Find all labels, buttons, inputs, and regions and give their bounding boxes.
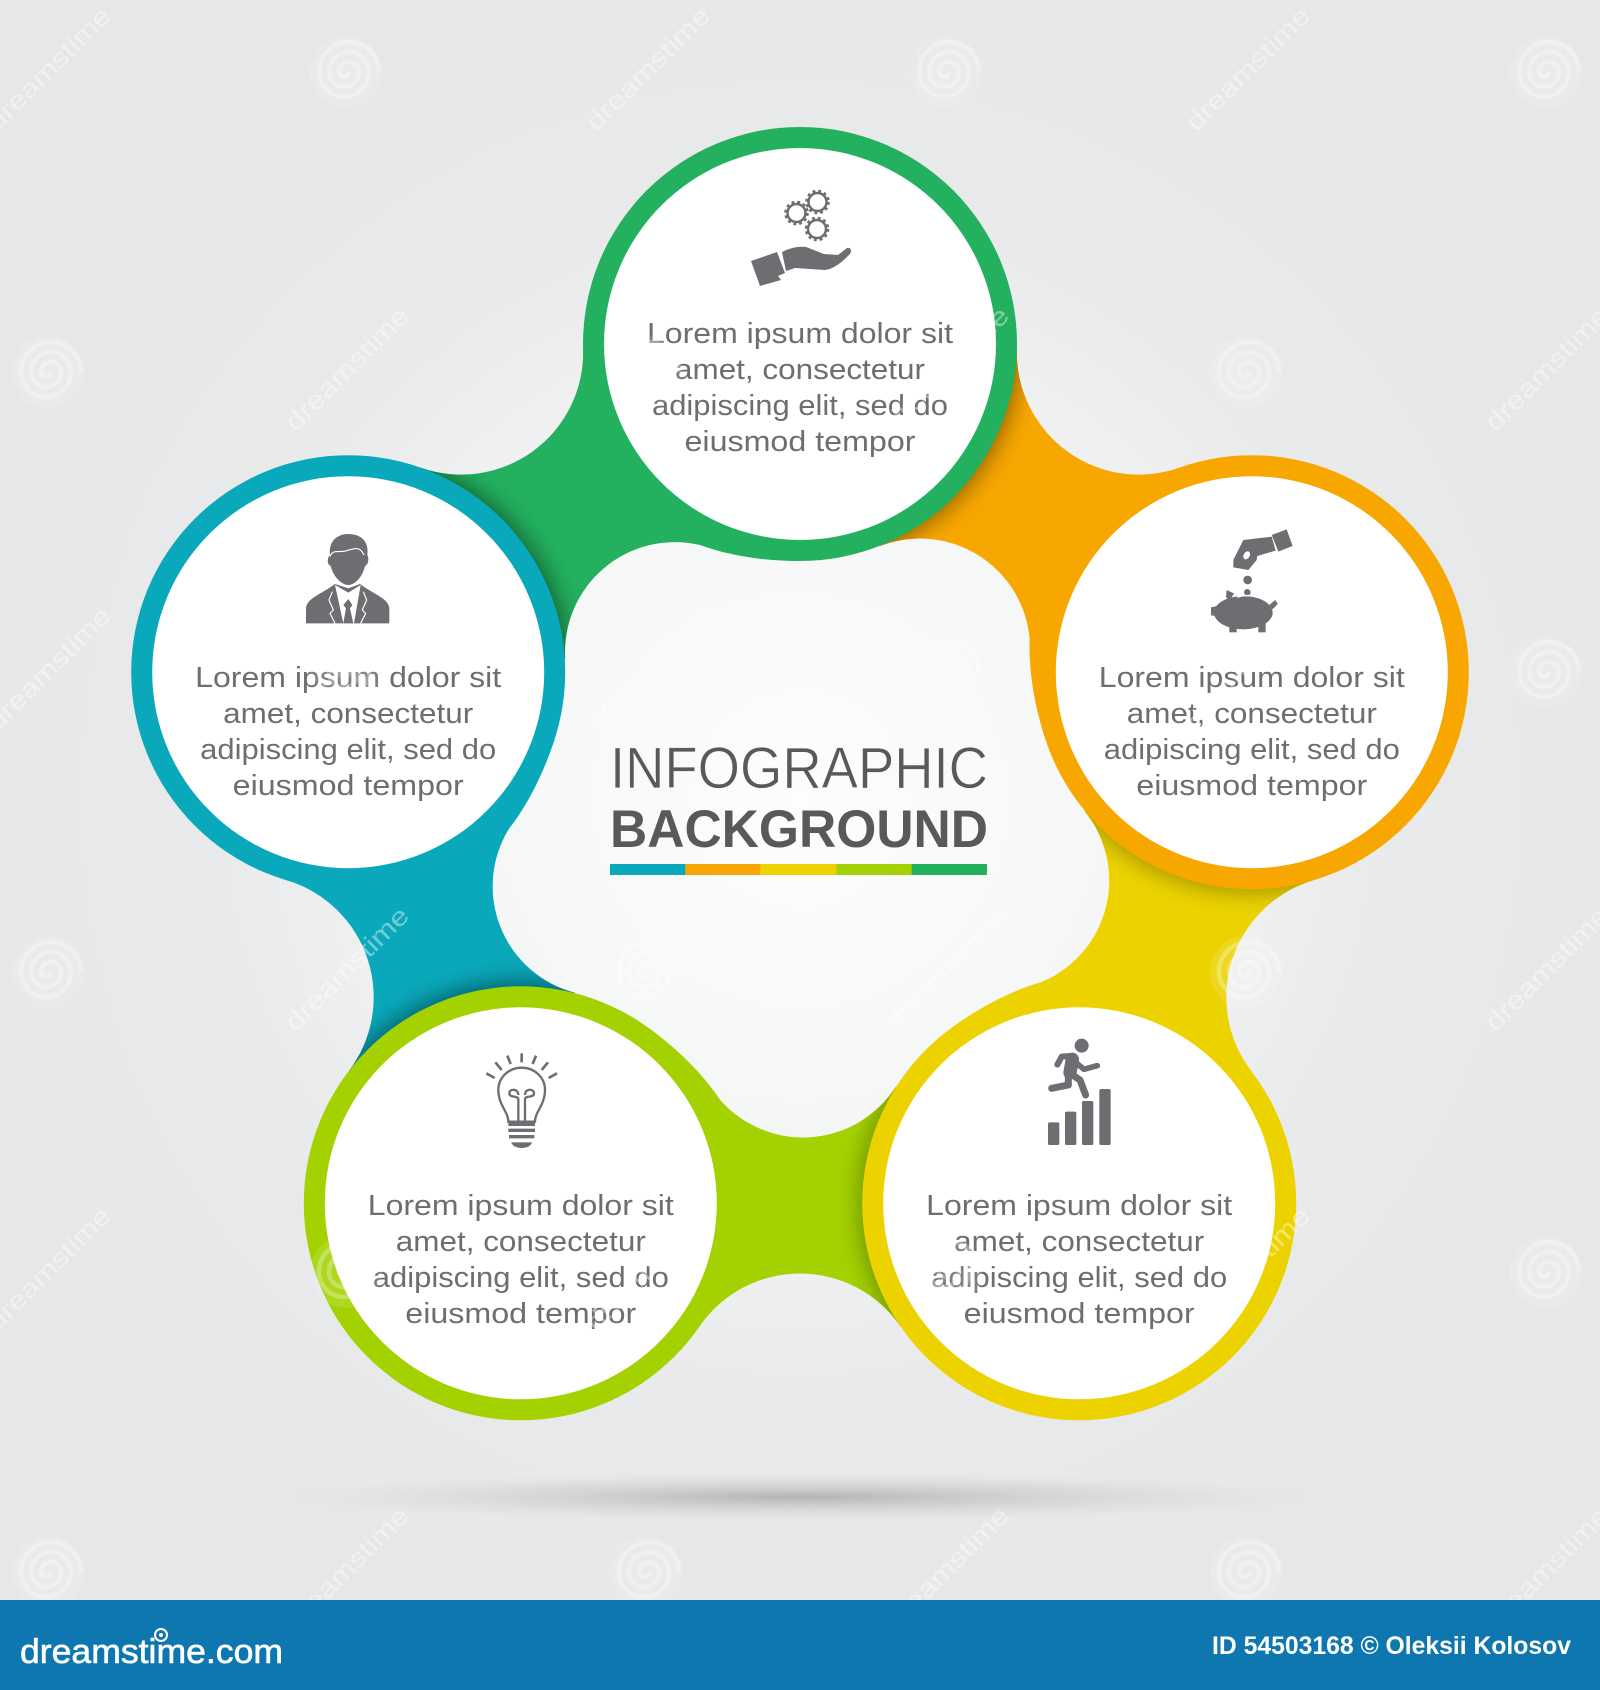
watermarks: dreamstime: [579, 1200, 716, 1337]
text: bottom left circle: amet, consectetur: [396, 1226, 646, 1258]
text: bottom right circle: amet, consectetur: [954, 1226, 1205, 1258]
text: bottom right circle: Lorem ipsum dolor sit: [926, 1190, 1232, 1222]
watermarks: dreamstime: [579, 0, 716, 137]
text: bottom right circle: eiusmod tempor: [964, 1298, 1195, 1330]
text: bottom left circle: [368, 1190, 674, 1330]
title colour bar: [610, 864, 987, 875]
title: BACKGROUND: [610, 800, 988, 859]
text: left circle: adipiscing elit, sed do: [200, 734, 496, 766]
watermarks: dreamstime: [1478, 900, 1600, 1037]
footer credit: ID 54503168 © Oleksii Kolosov: [1212, 1632, 1571, 1660]
connector: lime: [648, 1028, 900, 1326]
watermarks: dreamstime: [1179, 600, 1316, 737]
text: top circle: adipiscing elit, sed do: [652, 390, 948, 422]
watermarks: dreamstime: [278, 900, 415, 1037]
text: right circle: amet, consectetur: [1127, 698, 1377, 730]
watermarks: dreamstime: [579, 600, 716, 737]
text: left circle: eiusmod tempor: [233, 770, 464, 802]
text: left circle: amet, consectetur: [223, 698, 474, 730]
icon: businessman: [306, 534, 389, 623]
text: right circle: adipiscing elit, sed do: [1104, 734, 1400, 766]
text: right circle: Lorem ipsum dolor sit: [1099, 662, 1405, 694]
watermarks: dreamstime: [878, 300, 1015, 437]
panel: left blue circle: [131, 455, 565, 889]
floor shadow: [290, 1473, 1310, 1521]
panel: bottom left lime circle: [304, 986, 738, 1420]
text: top circle: [647, 318, 953, 458]
watermarks: dreamstime: [1179, 0, 1316, 137]
watermarks: dreamstime: [878, 900, 1015, 1037]
text: top circle: Lorem ipsum dolor sit: [647, 318, 953, 350]
text: right circle: [1099, 662, 1405, 802]
footer logo: dreamstime.com: [20, 1633, 283, 1671]
text: bottom right circle: [926, 1190, 1232, 1330]
connector: blue: [286, 739, 575, 1072]
text: top circle: eiusmod tempor: [684, 426, 916, 458]
title: INFOGRAPHIC: [610, 736, 988, 801]
connector: green: [420, 350, 799, 659]
panel: right orange circle: [1035, 455, 1469, 889]
icon: runner on rising bars: [1048, 1039, 1111, 1145]
text: top circle: amet, consectetur: [675, 354, 925, 386]
text: bottom left circle: eiusmod tempor: [405, 1298, 637, 1330]
panel: bottom right yellow circle: [862, 986, 1296, 1420]
watermarks: dreamstime: [1478, 300, 1600, 437]
watermarks: dreamstime: [1478, 1500, 1600, 1637]
text: left circle: [195, 662, 501, 802]
watermarks: dreamstime: [278, 300, 415, 437]
text: bottom right circle: adipiscing elit, sed do: [931, 1262, 1227, 1294]
text: bottom left circle: Lorem ipsum dolor sit: [368, 1190, 674, 1222]
connector: orange: [880, 349, 1180, 740]
panel: top green circle: [583, 127, 1017, 561]
icon: hand with gears: [751, 191, 851, 286]
title: [610, 736, 988, 859]
text: right circle: eiusmod tempor: [1136, 770, 1368, 802]
text: bottom left circle: adipiscing elit, sed do: [373, 1262, 669, 1294]
footer bar: [0, 1600, 1600, 1690]
watermarks: dreamstime: [278, 1500, 415, 1637]
watermarks: dreamstime: [878, 1500, 1015, 1637]
text: left circle: Lorem ipsum dolor sit: [195, 662, 501, 694]
icon: light bulb: [486, 1053, 557, 1148]
icon: hand and piggy bank: [1211, 529, 1293, 632]
watermarks: dreamstime: [1179, 1200, 1316, 1337]
connector: yellow: [952, 810, 1314, 1072]
